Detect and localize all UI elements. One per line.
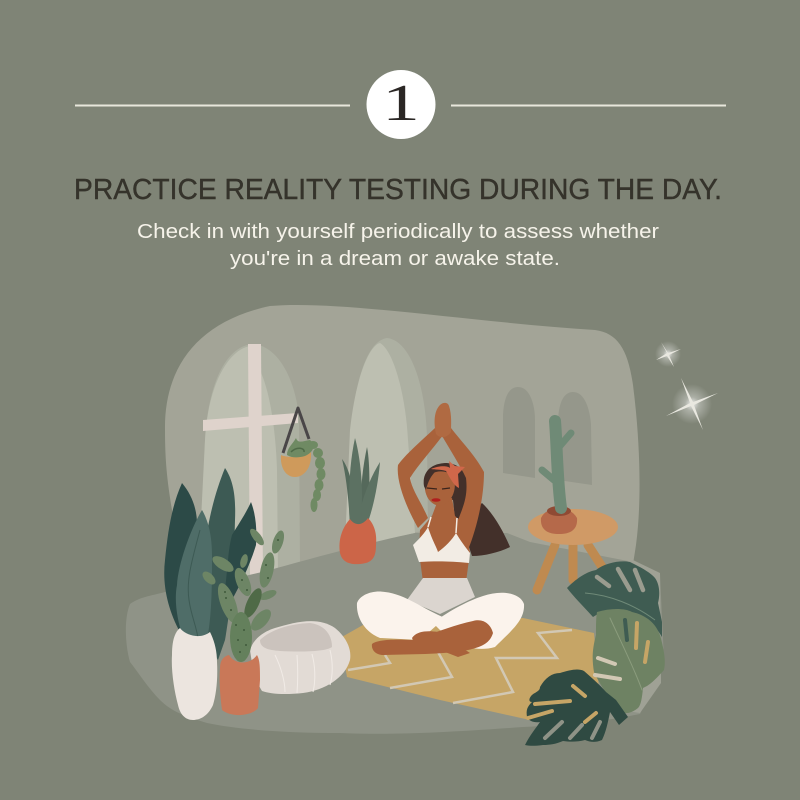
front leaf: [176, 510, 212, 640]
trailing vine: [308, 441, 326, 512]
top monstera leaf: [567, 561, 662, 637]
side table with cactus: [528, 421, 618, 590]
rug: [340, 618, 600, 720]
illustration: yoga room: [126, 305, 665, 746]
left arched window: [198, 344, 300, 580]
hanging plant: [281, 408, 326, 512]
room wall: [165, 305, 640, 640]
floor: [126, 533, 664, 734]
woman meditating: [357, 403, 524, 657]
long hair: [424, 463, 510, 556]
step number header: [75, 70, 726, 139]
crossed legs: [372, 620, 493, 657]
cactus spines: [224, 539, 279, 653]
front hair: [424, 463, 447, 490]
white bra: [413, 517, 470, 563]
description text: [137, 220, 659, 270]
praying hands: [435, 403, 451, 437]
headband: [431, 461, 465, 488]
rug zigzag pattern: [348, 630, 572, 703]
back left dark leaves: [164, 468, 256, 660]
snake plant in red pot: [339, 438, 380, 564]
monstera leaves: [525, 561, 665, 746]
middle monstera leaf: [593, 609, 665, 713]
table cactus: [542, 421, 571, 508]
sparkle upper: [655, 341, 681, 367]
white vase: [172, 628, 217, 720]
description text: you're in a dream or awake state.: [230, 247, 560, 270]
lighter patch behind monstera: [620, 560, 661, 713]
pouf: [250, 621, 350, 694]
facial features: [427, 488, 450, 502]
arms: [398, 428, 484, 550]
small arches on back wall: [503, 387, 592, 485]
bottom monstera leaf: [525, 670, 628, 746]
description text: Check in with yourself periodically to assess whether: [137, 220, 659, 243]
step number header: 1: [382, 74, 420, 132]
gray waistband and top of pants: [407, 578, 475, 614]
center arched window: [345, 338, 428, 545]
face: [425, 471, 455, 506]
white pants: [357, 592, 524, 649]
terracotta pot: [220, 655, 260, 715]
heading: PRACTICE REALITY TESTING DURING THE DAY.: [74, 174, 722, 206]
torso: [419, 498, 470, 582]
prickly pear cactus: [200, 527, 286, 662]
sparkle lower: [666, 378, 718, 430]
